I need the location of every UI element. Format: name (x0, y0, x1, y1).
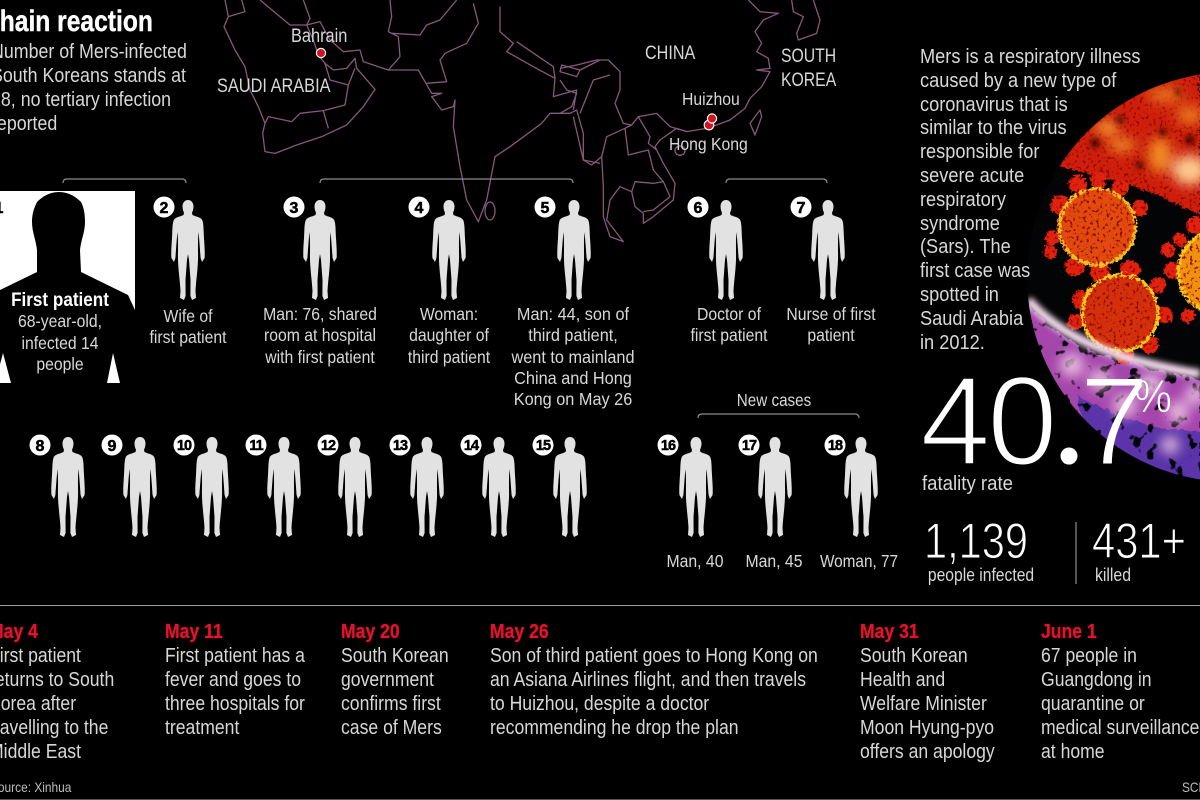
timeline: May 20: South Korean (341, 645, 449, 667)
description of Mers: (Sars). The (920, 236, 1011, 258)
timeline: May 31: Moon Hyung-pyo (860, 717, 994, 739)
caption: patient 4: daughter of (409, 325, 489, 345)
map: outline of Middle East and Asia (224, 0, 820, 242)
caption: patient 16: Man, 40 (667, 551, 723, 571)
map city markers (316, 48, 717, 130)
description of Mers: Mers is a respiratory illness (920, 46, 1140, 68)
badge numbers: 6 (694, 200, 703, 217)
badge numbers: 14 (464, 438, 479, 454)
stat: 40.7% (924, 377, 1170, 464)
timeline: May 26: Son of third patient goes to Hong Kong on (490, 645, 818, 667)
label: Huizhou: Huizhou (682, 89, 740, 109)
description of Mers: respiratory (920, 189, 1006, 211)
stat: 40.7%: % (1134, 370, 1172, 422)
timeline: May 26: an Asiana Airlines flight, and then travels (490, 669, 806, 691)
timeline: May 31: offers an apology (860, 741, 995, 763)
micrograph: pale membrane edge and blotches (1028, 300, 1200, 454)
timeline: June 1: 67 people in (1041, 645, 1137, 667)
stat: 1,139: 1,139 (924, 513, 1028, 569)
timeline: May 20: confirms first (341, 693, 441, 715)
caption: patient 2: Wife of (163, 306, 213, 326)
description of Mers: severe acute (920, 165, 1024, 187)
micrograph: dark flecks in cell mass (1090, 89, 1195, 169)
timeline: May 20: case of Mers (341, 717, 442, 739)
intro text (0, 41, 187, 135)
caption: patient 4: third patient (408, 347, 490, 367)
caption: patient 6: Doctor of (697, 304, 761, 324)
timeline: May 31: South Korean (860, 645, 968, 667)
caption: patient 4 (408, 304, 490, 367)
first patient caption: 68-year-old, (18, 311, 102, 331)
brackets (63, 179, 859, 418)
badge 1 (0, 197, 10, 217)
timeline: May 20 (341, 621, 449, 739)
big patient silhouette panel (0, 191, 135, 400)
label: South Korea: SOUTH (781, 46, 836, 67)
caption: patient 7 (786, 304, 876, 345)
people figures row 1 (171, 200, 845, 300)
timeline: May 31 (860, 621, 995, 763)
caption: patient 2: first patient (149, 327, 227, 347)
description of Mers: in 2012. (920, 332, 985, 354)
map: East and South-East Asia coast and borders (560, 0, 820, 242)
timeline: May 11: First patient has a (165, 645, 305, 667)
timeline: May 26: recommending he drop the plan (490, 717, 739, 739)
timeline: May 11: fever and goes to (165, 669, 301, 691)
timeline: June 1: quarantine or (1041, 693, 1145, 715)
micrograph: orange cell mass at top (1059, 74, 1200, 216)
label: South Korea (781, 46, 836, 91)
caption: patient 17: Man, 45 (746, 551, 802, 571)
timeline: June 1: medical surveillance (1041, 717, 1199, 739)
badge numbers: 8 (36, 438, 45, 455)
timeline: May 11: treatment (165, 717, 239, 739)
label: people infected: people infected (928, 565, 1034, 585)
timeline: June 1: June 1 (1041, 621, 1097, 643)
badge numbers: 3 (290, 200, 299, 217)
description of Mers: first case was (920, 260, 1030, 282)
label: Hong Kong: Hong Kong (669, 134, 748, 154)
micrograph: purple membrane (1028, 304, 1200, 480)
badge numbers: 5 (541, 200, 550, 217)
timeline: May 4 (0, 621, 114, 763)
caption: patient 5: third patient, (528, 325, 618, 345)
badge numbers: 17 (742, 438, 757, 454)
badge numbers: 11 (249, 438, 264, 454)
timeline: June 1: at home (1041, 741, 1105, 763)
caption: patient 5: Man: 44, son of (517, 304, 629, 324)
caption: patient 3: room at hospital (264, 325, 376, 345)
label: Saudi Arabia: SAUDI ARABIA (217, 76, 331, 96)
map: Arabia and South Asia borders (224, 0, 600, 222)
badge numbers: 10 (177, 438, 192, 454)
timeline: May 20: government (341, 669, 434, 691)
timeline: May 31: Health and (860, 669, 945, 691)
badge numbers: 18 (828, 438, 843, 454)
caption: patient 6 (690, 304, 768, 345)
caption: patient 5: went to mainland (511, 347, 635, 367)
number badges (30, 196, 846, 456)
caption: patient 18: Woman, 77 (820, 551, 898, 571)
virus micrograph circle (1028, 74, 1200, 480)
description of Mers: spotted in (920, 284, 999, 306)
timeline: May 11: three hospitals for (165, 693, 305, 715)
timeline: May 26: May 26 (490, 621, 549, 643)
description of Mers (920, 46, 1140, 354)
stat: 40.7%: 40.7 (920, 350, 1150, 492)
stat divider (1075, 522, 1077, 584)
badge numbers (36, 200, 843, 455)
caption: patient 6: first patient (690, 325, 768, 345)
description of Mers: Saudi Arabia (920, 308, 1023, 330)
label: China: CHINA (645, 42, 695, 64)
people figures row 2 (51, 437, 878, 537)
map: Sri Lanka (485, 202, 495, 220)
caption: patient 4: Woman: (420, 304, 478, 324)
first patient caption: First patient (11, 290, 109, 311)
caption: patient 5 (511, 304, 635, 409)
label: South Korea: KOREA (781, 70, 836, 91)
timeline: June 1: Guangdong in (1041, 669, 1152, 691)
label: fatality rate: fatality rate (922, 473, 1013, 495)
timeline: May 31: Welfare Minister (860, 693, 987, 715)
badge numbers: 13 (393, 438, 408, 454)
badge numbers: 15 (536, 438, 551, 454)
timeline: May 11 (165, 621, 305, 739)
timeline: May 20: May 20 (341, 621, 400, 643)
badge numbers: 4 (415, 200, 424, 217)
timeline: June 1 (1041, 621, 1199, 763)
caption: patient 5: China and Hong (514, 368, 632, 388)
caption: new cases: New cases (737, 390, 811, 410)
timeline: May 31: May 31 (860, 621, 919, 643)
caption: patient 3: with first patient (265, 347, 375, 367)
description of Mers: syndrome (920, 213, 1000, 235)
map labels: Bahrain (291, 26, 347, 46)
micrograph: virus particles (1043, 172, 1200, 365)
timeline: May 26 (490, 621, 818, 739)
description of Mers: coronavirus that is (920, 94, 1068, 116)
caption: patient 3: Man: 76, shared (263, 304, 377, 324)
badge numbers: 9 (108, 438, 117, 455)
first patient caption: infected 14 (21, 333, 99, 353)
caption: patient 5: Kong on May 26 (514, 389, 632, 409)
description of Mers: responsible for (920, 141, 1039, 163)
caption: patient 7: patient (807, 325, 855, 345)
description of Mers: similar to the virus (920, 117, 1067, 139)
caption: patient 2 (149, 306, 227, 347)
badge numbers: 12 (321, 438, 336, 454)
label: killed: killed (1095, 565, 1131, 585)
caption: patient 3 (263, 304, 377, 367)
first patient caption: people (36, 354, 84, 374)
timeline: May 26: to Huizhou, despite a doctor (490, 693, 709, 715)
timeline: May 11: May 11 (165, 621, 223, 643)
caption: patient 7: Nurse of first (786, 304, 876, 324)
first patient caption (11, 290, 109, 374)
description of Mers: caused by a new type of (920, 70, 1116, 92)
badge numbers: 2 (160, 200, 169, 217)
badge numbers: 7 (797, 200, 806, 217)
badge numbers: 16 (661, 438, 676, 454)
